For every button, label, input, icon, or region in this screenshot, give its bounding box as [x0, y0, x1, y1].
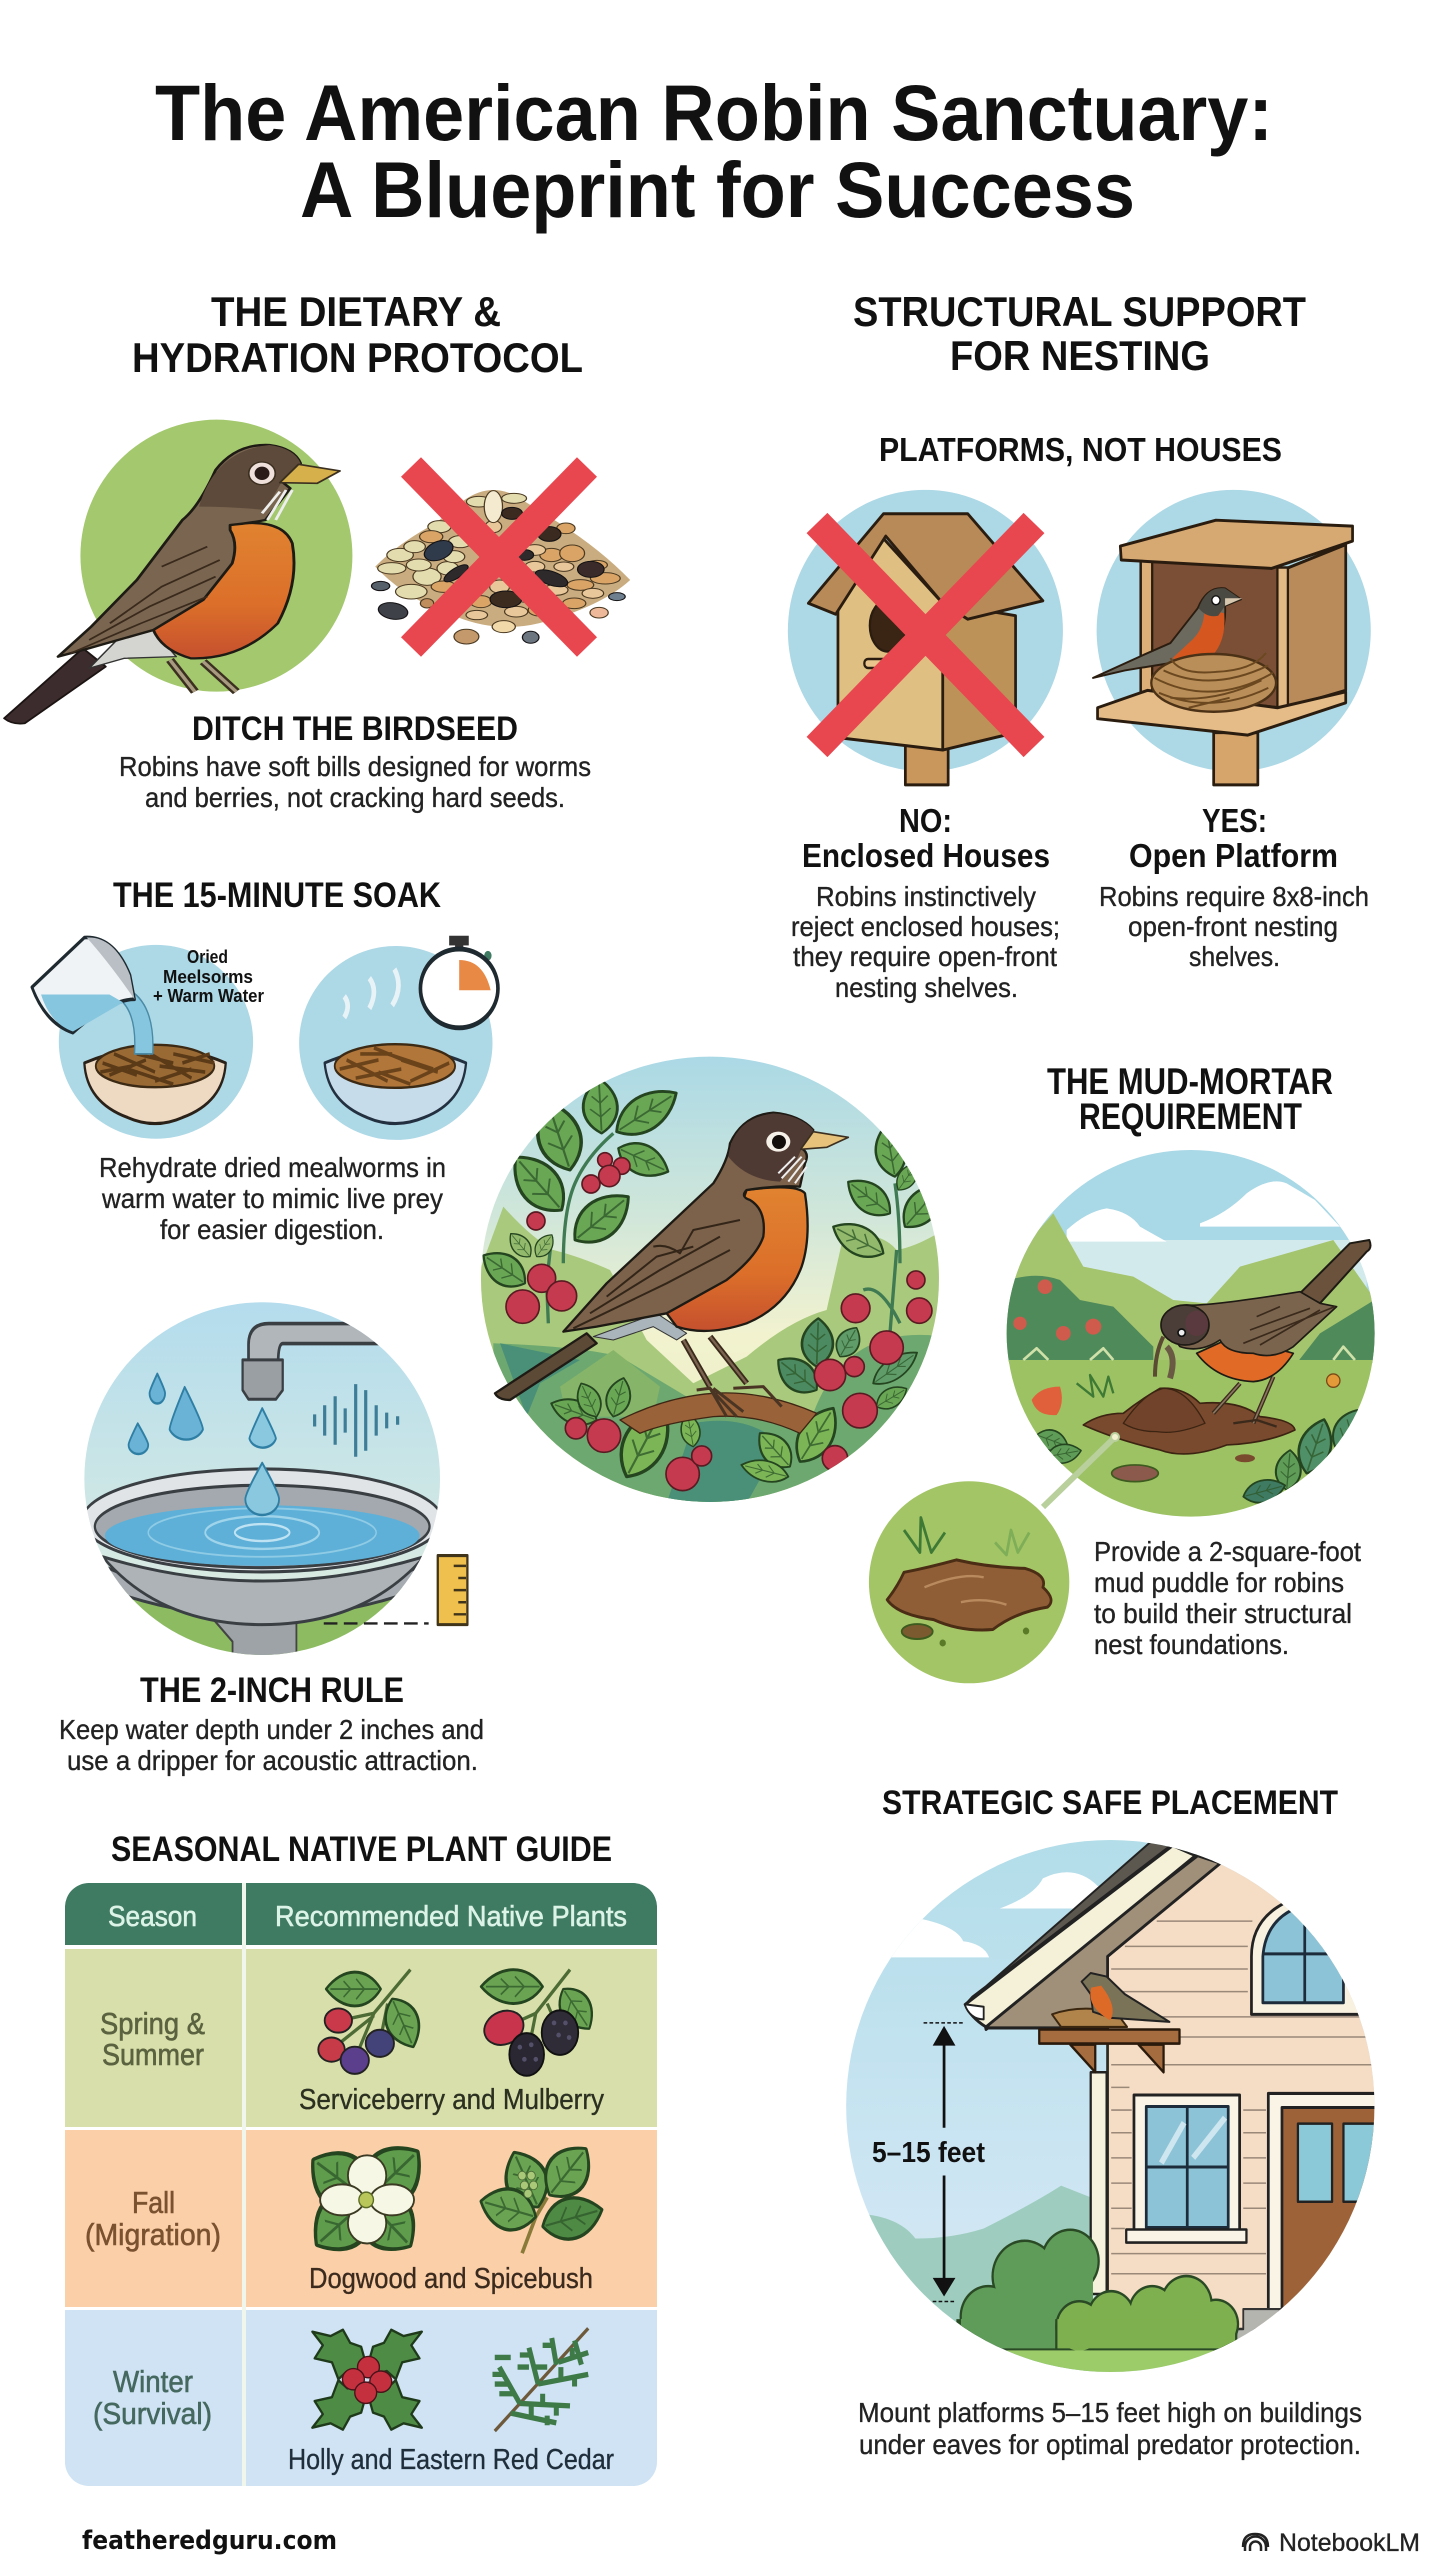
- text block: mount platforms: [858, 2397, 1362, 2460]
- text block: no enclosed houses: Enclosed Houses: [802, 837, 1050, 874]
- icon: enclosed birdhouse crossed out: [788, 490, 1063, 785]
- icon: open platform with robin: [1093, 490, 1371, 785]
- row: winter survival: Winter: [113, 2364, 193, 2399]
- heading: dietary and hydration protocol: THE DIETARY &: [211, 288, 501, 335]
- text block: yes open platform: [1099, 802, 1369, 972]
- heading: strategic safe placement: STRATEGIC SAFE PLACEMENT: [882, 1784, 1338, 1822]
- text block: ditch the birdseed: and berries, not cracking hard seeds.: [145, 782, 565, 813]
- text block: mud puddle: nest foundations.: [1094, 1629, 1289, 1660]
- table backgrounds: [65, 1883, 657, 2486]
- row: fall migration: [85, 2131, 607, 2295]
- central illustration: robin among berries: [475, 1050, 952, 1510]
- text block: rehydrate mealworms: [99, 1152, 446, 1245]
- heading: seasonal native plant guide: SEASONAL NATIVE PLANT GUIDE: [111, 1830, 612, 1869]
- icon: mud puddle closeup: [869, 1481, 1069, 1683]
- connector line from puddle to mud closeup: [1043, 1433, 1119, 1507]
- heading: the 15-minute soak: THE 15-MINUTE SOAK: [113, 876, 441, 915]
- row: fall migration: (Migration): [85, 2217, 221, 2252]
- heading: dietary and hydration protocol: HYDRATION PROTOCOL: [132, 334, 583, 381]
- text block: no enclosed houses: [791, 802, 1060, 1003]
- label: dried mealworms plus warm water: Oried: [187, 947, 228, 967]
- row: spring and summer: Summer: [102, 2037, 204, 2072]
- text block: no enclosed houses: Robins instinctively: [816, 881, 1036, 912]
- icon: robin on green circle: [4, 420, 352, 724]
- icon: pouring warm water on mealworms: [32, 937, 253, 1139]
- heading: the mud-mortar requirement: [1047, 1061, 1333, 1137]
- text block: no enclosed houses: nesting shelves.: [835, 972, 1018, 1003]
- text block: mount platforms: Mount platforms 5–15 feet high on buildings: [858, 2397, 1362, 2428]
- title: A Blueprint for Success: [300, 145, 1135, 234]
- icon: house with platform under eaves: [845, 1838, 1382, 2376]
- row: fall migration: Dogwood and Spicebush: [309, 2263, 593, 2295]
- label: dried mealworms plus warm water: + Warm Water: [153, 986, 264, 1006]
- text block: yes open platform: shelves.: [1189, 941, 1280, 972]
- heading: dietary and hydration protocol: [132, 288, 583, 381]
- title: [155, 68, 1273, 234]
- icon: soaked mealworms with timer: [299, 936, 498, 1140]
- text block: ditch the birdseed: Robins have soft bills designed for worms: [119, 751, 591, 782]
- text block: rehydrate mealworms: for easier digestion.: [160, 1214, 384, 1245]
- heading: the mud-mortar requirement: THE MUD-MORTAR: [1047, 1061, 1333, 1102]
- footer: website credit: featheredguru.com: [82, 2526, 337, 2556]
- heading: the mud-mortar requirement: REQUIREMENT: [1079, 1096, 1302, 1137]
- text block: yes open platform: Robins require 8x8-inch: [1099, 881, 1369, 912]
- text block: ditch the birdseed: [119, 710, 591, 813]
- icon: robin gathering mud: [1006, 1150, 1375, 1517]
- row: winter survival: (Survival): [93, 2396, 212, 2431]
- text block: no enclosed houses: they require open-front: [793, 941, 1057, 972]
- row: winter survival: Holly and Eastern Red Cedar: [288, 2444, 614, 2476]
- icon: birdseed pile crossed out: [371, 467, 630, 647]
- row: fall migration: Fall: [132, 2185, 175, 2220]
- heading: platforms, not houses: PLATFORMS, NOT HOUSES: [879, 431, 1282, 468]
- text block: rehydrate mealworms: Rehydrate dried mealworms in: [99, 1152, 446, 1183]
- row: spring and summer: Serviceberry and Mulberry: [299, 2084, 604, 2116]
- row: winter survival: [93, 2328, 614, 2476]
- icon: bird bath with dripper: [82, 1299, 467, 1663]
- text block: mud puddle: to build their structural: [1094, 1598, 1352, 1629]
- table: seasonal native plant guide: [65, 1883, 657, 2486]
- header row: Season: [108, 1901, 197, 1933]
- label: 5-15 feet: 5–15 feet: [872, 2137, 985, 2169]
- text block: no enclosed houses: reject enclosed houses;: [791, 911, 1060, 942]
- text block: mud puddle: Provide a 2-square-foot: [1094, 1536, 1361, 1567]
- label: dried mealworms plus warm water: Meelsorms: [163, 967, 253, 987]
- text block: rehydrate mealworms: warm water to mimic live prey: [101, 1183, 443, 1214]
- text block: the 2-inch rule: THE 2-INCH RULE: [140, 1671, 404, 1710]
- text block: mount platforms: under eaves for optimal predator protection.: [859, 2429, 1361, 2460]
- text block: ditch the birdseed: DITCH THE BIRDSEED: [192, 710, 518, 748]
- header row: Recommended Native Plants: [275, 1901, 627, 1933]
- text block: mud puddle: mud puddle for robins: [1094, 1567, 1344, 1598]
- row: spring and summer: [100, 1970, 604, 2116]
- text block: the 2-inch rule: Keep water depth under 2 inches and: [59, 1714, 484, 1745]
- row: spring and summer: Spring &: [100, 2006, 205, 2041]
- text block: yes open platform: YES:: [1202, 802, 1267, 839]
- label: dried mealworms plus warm water: [153, 947, 264, 1006]
- footer: NotebookLM logo: NotebookLM: [1279, 2529, 1420, 2557]
- title: The American Robin Sanctuary:: [155, 68, 1273, 157]
- text block: the 2-inch rule: [59, 1671, 484, 1776]
- text block: yes open platform: Open Platform: [1129, 837, 1338, 874]
- text block: yes open platform: open-front nesting: [1128, 911, 1338, 942]
- heading: structural support for nesting: [853, 288, 1306, 379]
- heading: structural support for nesting: STRUCTURAL SUPPORT: [853, 288, 1306, 335]
- text block: the 2-inch rule: use a dripper for acoustic attraction.: [67, 1745, 478, 1776]
- heading: structural support for nesting: FOR NESTING: [950, 332, 1210, 379]
- header row: [108, 1901, 627, 1933]
- text block: no enclosed houses: NO:: [899, 802, 952, 839]
- text block: mud puddle: [1094, 1536, 1361, 1660]
